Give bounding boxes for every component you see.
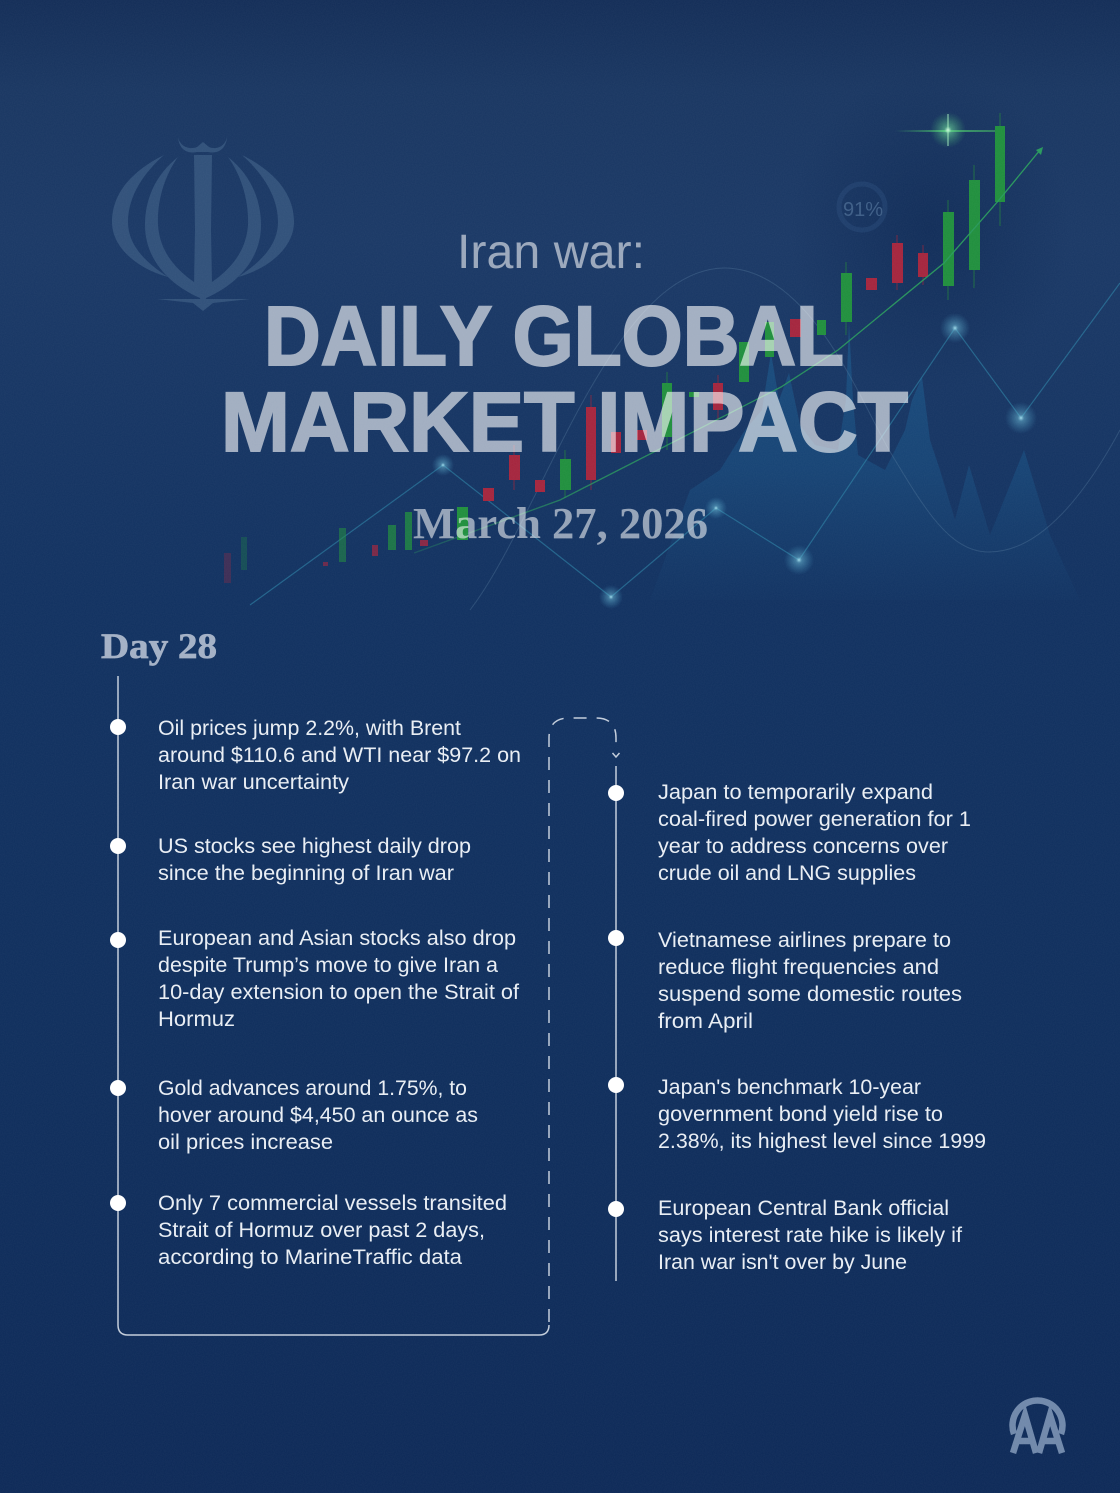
text block: US stocks: since the beginning of Iran war bbox=[158, 861, 454, 885]
chart: red candlesticks bbox=[224, 243, 928, 583]
text block: gold bbox=[158, 1076, 478, 1154]
title kicker: Iran war: bbox=[457, 226, 645, 279]
heading: Day 28: Day 28 bbox=[101, 626, 217, 666]
text block: Japan coal bbox=[658, 780, 971, 885]
chart: candlestick wicks bbox=[514, 113, 1000, 498]
text block: oil prices bbox=[158, 716, 521, 794]
text block: commercial vessels: Strait of Hormuz over past 2 days, bbox=[158, 1218, 485, 1242]
chart: green candlesticks bbox=[241, 126, 1005, 570]
text block: European and Asian stocks: despite Trump’s move to give Iran a bbox=[158, 953, 498, 977]
text block: Vietnamese airlines: reduce flight frequencies and bbox=[658, 955, 939, 979]
text block: European Central Bank: European Central Bank official bbox=[658, 1196, 949, 1220]
text block: Japan bond yield: government bond yield rise to bbox=[658, 1102, 943, 1126]
text block: European and Asian stocks bbox=[158, 926, 519, 1031]
text block: Vietnamese airlines: from April bbox=[658, 1009, 753, 1033]
text block: Japan coal: year to address concerns over bbox=[658, 834, 948, 858]
text block: commercial vessels: Only 7 commercial vessels transited bbox=[158, 1191, 507, 1215]
chart: network lines bbox=[250, 283, 1120, 605]
text block: commercial vessels: according to MarineTraffic data bbox=[158, 1245, 462, 1269]
chart: sine curve bbox=[470, 268, 1120, 610]
text block: European and Asian stocks: European and Asian stocks also drop bbox=[158, 926, 516, 950]
chart: blue mountain area bbox=[650, 323, 1080, 600]
title bbox=[221, 226, 908, 548]
text block: Vietnamese airlines: suspend some domestic routes bbox=[658, 982, 962, 1006]
text block: oil prices: Oil prices jump 2.2%, with Brent bbox=[158, 716, 461, 740]
text block: commercial vessels bbox=[158, 1191, 507, 1269]
icon: AA agency logo bbox=[1012, 1400, 1063, 1453]
chart: percentage ring: 91% bbox=[843, 199, 883, 221]
text block: oil prices: around $110.6 and WTI near $97.2 on bbox=[158, 743, 521, 767]
text block: US stocks bbox=[158, 834, 471, 885]
chart: green trend arrow bbox=[414, 147, 1043, 553]
title line 2: MARKET IMPACT bbox=[221, 375, 908, 469]
text block: US stocks: US stocks see highest daily drop bbox=[158, 834, 471, 858]
text block: gold: hover around $4,450 an ounce as bbox=[158, 1103, 478, 1127]
text block: European Central Bank: Iran war isn't over by June bbox=[658, 1250, 907, 1274]
text block: gold: oil prices increase bbox=[158, 1130, 333, 1154]
icon: Iran emblem watermark bbox=[112, 137, 294, 311]
timeline connector bbox=[118, 676, 620, 1335]
chart: percentage ring bbox=[839, 184, 885, 230]
chart: network glow nodes bbox=[432, 313, 1037, 609]
text block: Japan coal: Japan to temporarily expand bbox=[658, 780, 933, 804]
text block: gold: Gold advances around 1.75%, to bbox=[158, 1076, 467, 1100]
text block: Japan coal: crude oil and LNG supplies bbox=[658, 861, 916, 885]
text block: European and Asian stocks: Hormuz bbox=[158, 1007, 235, 1031]
title line 1: DAILY GLOBAL bbox=[264, 289, 844, 383]
text block: European Central Bank bbox=[658, 1196, 962, 1274]
icon: green star glow bbox=[895, 112, 995, 148]
text block: Vietnamese airlines bbox=[658, 928, 962, 1033]
text block: Japan bond yield: Japan's benchmark 10-year bbox=[658, 1075, 921, 1099]
text block: European Central Bank: says interest rate hike is likely if bbox=[658, 1223, 962, 1247]
text block: Japan bond yield bbox=[658, 1075, 986, 1153]
text block: European and Asian stocks: 10-day extension to open the Strait of bbox=[158, 980, 519, 1004]
text block: Japan bond yield: 2.38%, its highest level since 1999 bbox=[658, 1129, 986, 1153]
text block: Vietnamese airlines: Vietnamese airlines prepare to bbox=[658, 928, 951, 952]
text block: oil prices: Iran war uncertainty bbox=[158, 770, 349, 794]
date: March 27, 2026 bbox=[413, 499, 708, 548]
timeline dots bbox=[110, 719, 624, 1217]
text block: Japan coal: coal-fired power generation for 1 bbox=[658, 807, 971, 831]
